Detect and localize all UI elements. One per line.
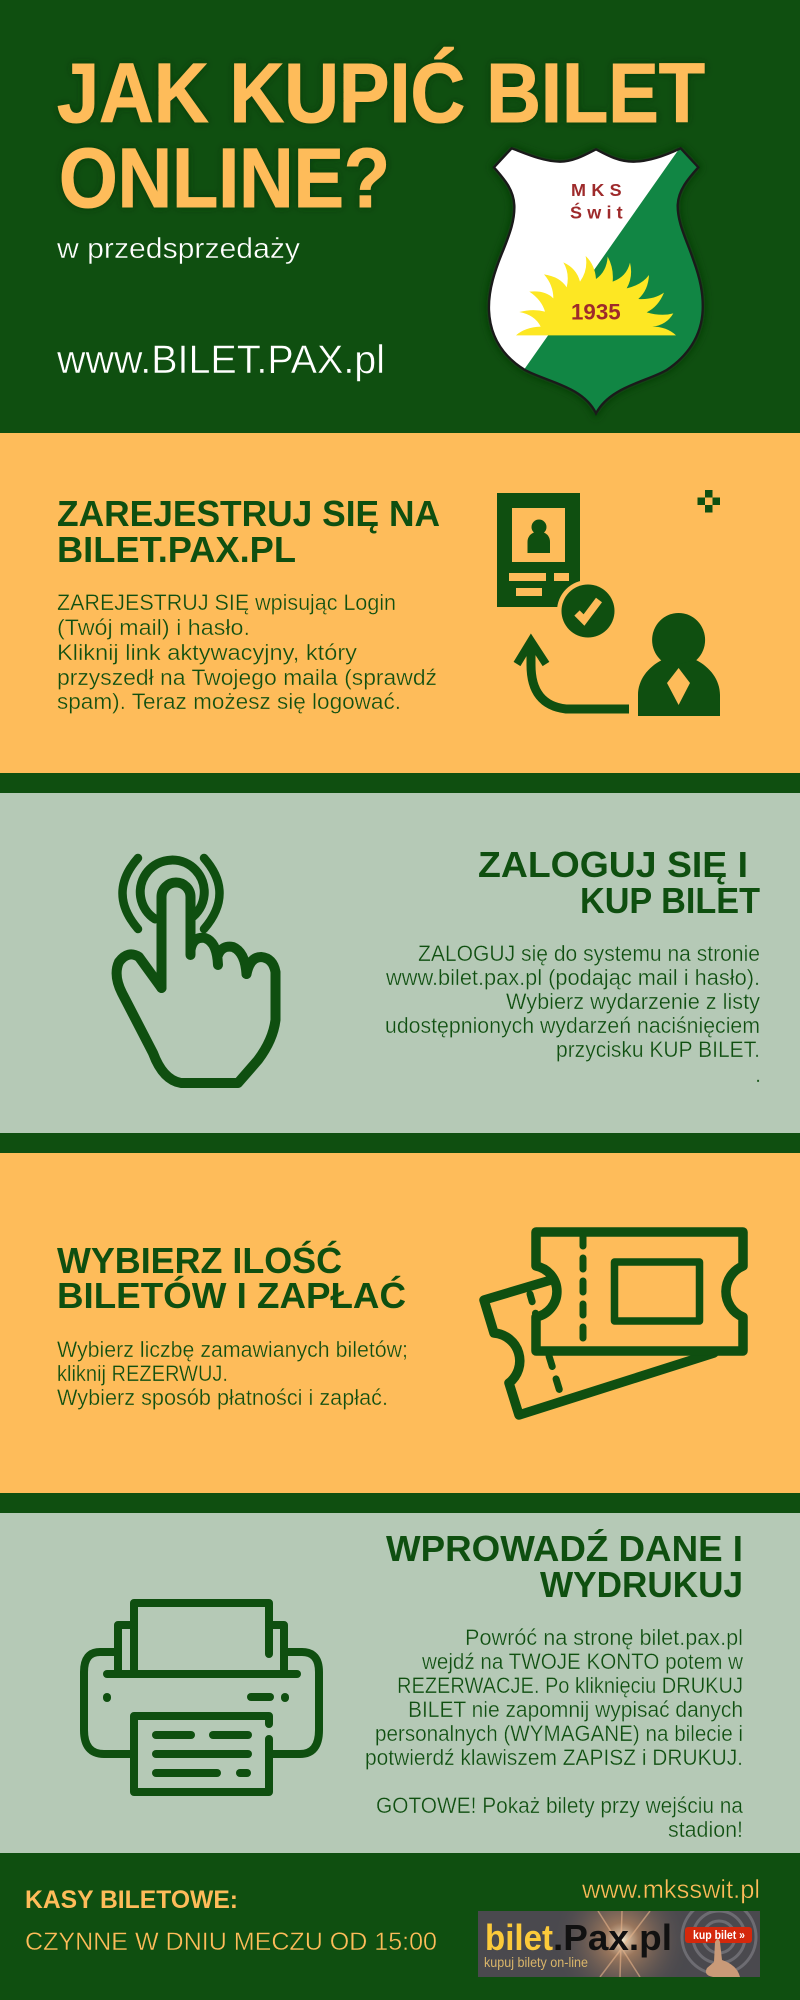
title: JAK KUPIĆ BILET [57, 46, 705, 140]
title [57, 46, 705, 225]
text block: step 4: potwierdź klawiszem ZAPISZ i DRUKUJ. [365, 1745, 743, 1770]
icon: printer [84, 1603, 319, 1792]
icon: hand tapping [117, 858, 275, 1083]
icon: small pixel cross [698, 490, 720, 512]
text block: step 2 [385, 941, 761, 1087]
footer: bilet.pax.pl banner: kupuj bilety on-line [484, 1954, 588, 1970]
icon: MKS Świt club crest [487, 147, 707, 417]
text block: step 1: Kliknij link aktywacyjny, który [57, 640, 357, 665]
heading: step 4: WPROWADŹ DANE I [386, 1528, 743, 1569]
text block: step 1: ZAREJESTRUJ SIĘ wpisując Login [57, 590, 396, 615]
heading: step 4 [386, 1528, 743, 1605]
text block: step 4 [365, 1625, 744, 1842]
icon: MKS Świt club crest: 1935 [571, 299, 621, 324]
heading: step 1: ZAREJESTRUJ SIĘ NA [57, 493, 440, 534]
text block: step 1: spam). Teraz możesz się logować. [57, 689, 401, 714]
text block: step 4: GOTOWE! Pokaż bilety przy wejściu na [376, 1793, 744, 1818]
panel: step 3 background [0, 1153, 800, 1493]
text block: step 1: przyszedł na Twojego maila (sprawdź [57, 665, 437, 690]
panel: header background [0, 0, 800, 433]
text block: step 3: Wybierz sposób płatności i zapłać. [57, 1385, 388, 1410]
footer: ticket office hours: CZYNNE W DNIU MECZU OD 15:00 [25, 1928, 437, 1956]
text block: step 2: . [755, 1062, 761, 1087]
footer: bilet.pax.pl banner: bilet [485, 1917, 553, 1958]
panel: step 1 background [0, 433, 800, 773]
text block: step 2: Wybierz wydarzenie z listy [506, 989, 760, 1014]
heading: step 1 [57, 493, 440, 570]
panel: step 2 background [0, 793, 800, 1133]
text block: step 2: www.bilet.pax.pl (podając mail i hasło). [385, 965, 760, 990]
title: ONLINE? [59, 131, 390, 225]
icon: MKS Świt club crest: MKS [571, 180, 622, 200]
panel: step 4 background [0, 1513, 800, 1853]
text block: step 1: (Twój mail) i hasło. [57, 615, 250, 640]
text block: step 4: wejdź na TWOJE KONTO potem w [421, 1649, 743, 1674]
text block: step 4: BILET nie zapomnij wypisać danych [408, 1697, 743, 1722]
text block: step 1 [57, 590, 437, 714]
icon: MKS Świt club crest: Świt [570, 201, 623, 222]
website address: www.BILET.PAX.pl [56, 338, 385, 382]
text block: step 4: stadion! [668, 1817, 743, 1842]
text block: step 3: Wybierz liczbę zamawianych biletów; [57, 1337, 408, 1362]
text block: step 4: REZERWACJE. Po kliknięciu DRUKUJ [397, 1673, 743, 1698]
text block: step 4: personalnych (WYMAGANE) na bilecie i [375, 1721, 743, 1746]
heading: step 3: BILETÓW I ZAPŁAĆ [57, 1274, 406, 1316]
text block: step 2: przycisku KUP BILET. [556, 1037, 760, 1062]
footer: bilet.pax.pl banner [478, 1911, 760, 1977]
heading: step 2: ZALOGUJ SIĘ I [478, 844, 748, 885]
footer: bilet.pax.pl banner: kup bilet » [693, 1928, 745, 1942]
heading: step 4: WYDRUKUJ [540, 1564, 743, 1605]
text block: step 3 [57, 1337, 408, 1410]
text block: step 2: ZALOGUJ się do systemu na stronie [418, 941, 760, 966]
icon: two tickets [484, 1232, 743, 1415]
footer: ticket office heading: KASY BILETOWE: [25, 1886, 238, 1914]
subtitle: w przedsprzedaży [56, 233, 301, 265]
heading: step 3 [57, 1239, 406, 1316]
footer: club website: www.mksswit.pl [581, 1874, 760, 1904]
heading: step 1: BILET.PAX.PL [57, 529, 296, 570]
text block: step 3: kliknij REZERWUJ. [57, 1361, 228, 1386]
icon: registration form and user [497, 493, 720, 716]
text block: step 2: udostępnionych wydarzeń naciśnięciem [385, 1013, 760, 1038]
heading: step 2 [478, 844, 760, 921]
footer: bilet.pax.pl banner: .Pax.pl [553, 1917, 672, 1958]
heading: step 2: KUP BILET [580, 880, 760, 921]
heading: step 3: WYBIERZ ILOŚĆ [57, 1239, 342, 1281]
text block: step 4: Powróć na stronę bilet.pax.pl [465, 1625, 743, 1650]
